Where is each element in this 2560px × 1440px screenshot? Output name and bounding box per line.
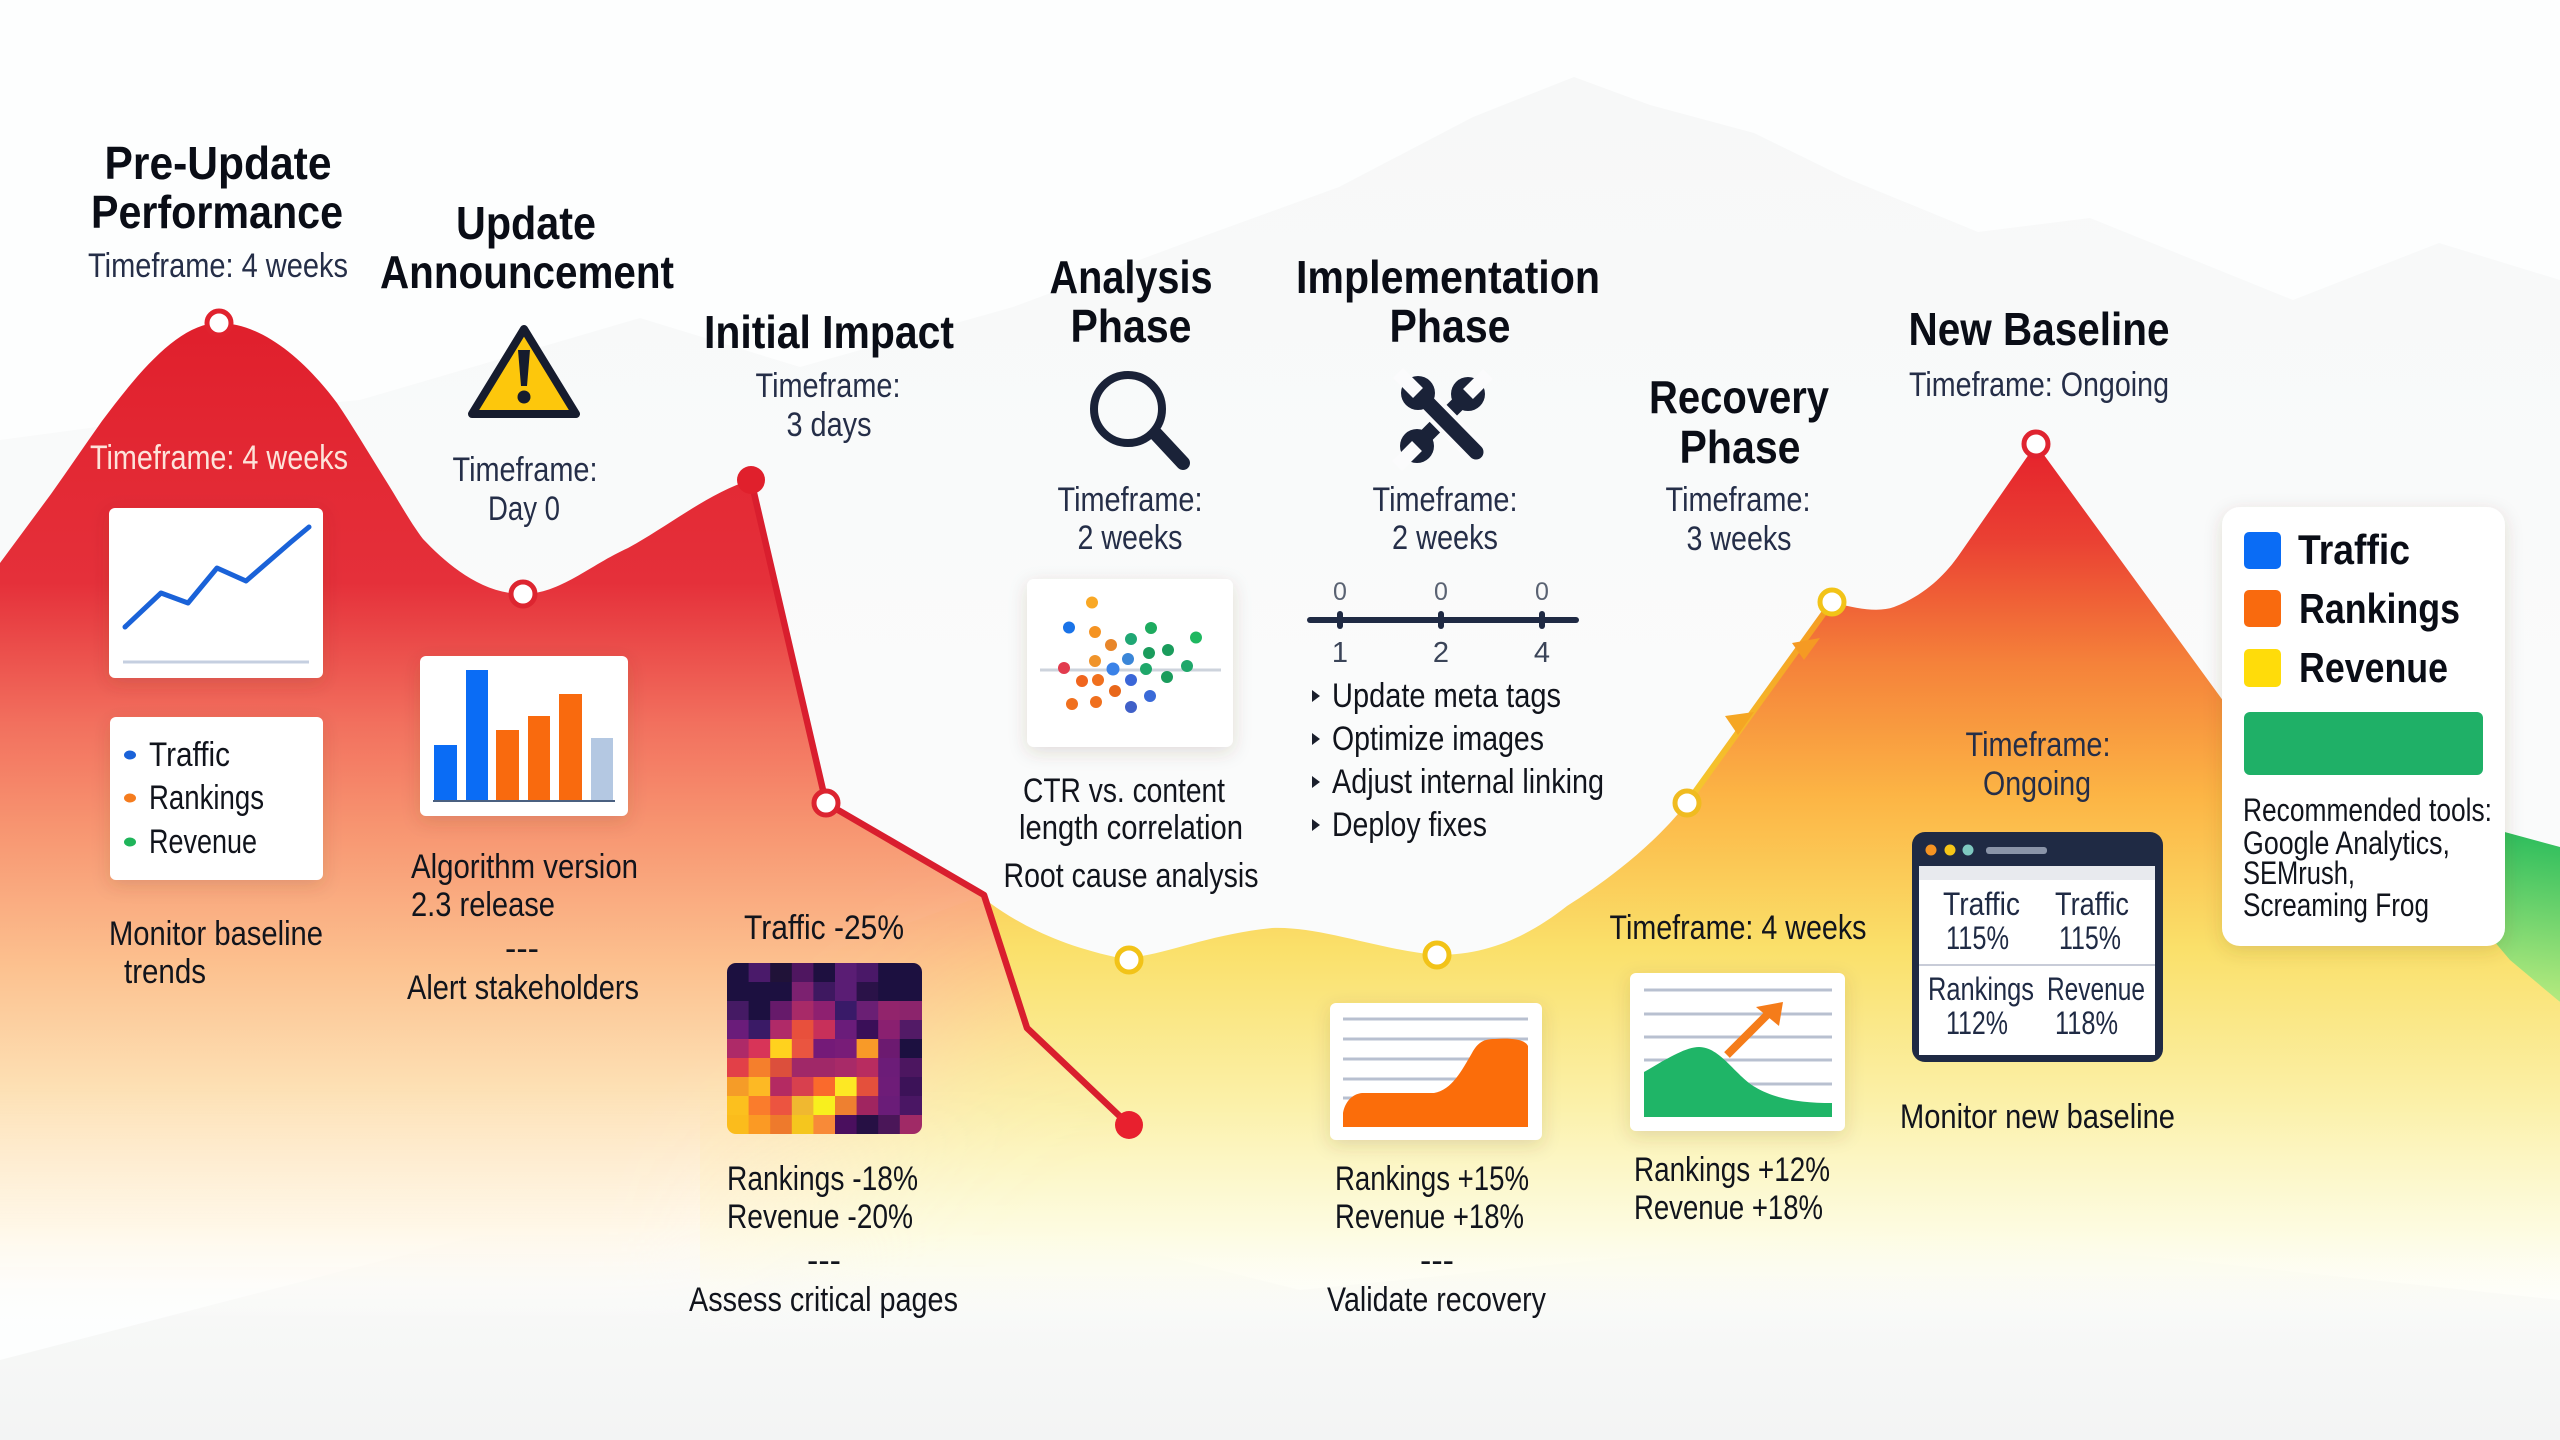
text: algorithm release: 2.3 release: [411, 886, 555, 924]
icon: warning triangle: [472, 329, 576, 414]
text: monitor baseline trends: trends: [124, 953, 206, 991]
icon: magnifying glass: [1094, 375, 1183, 463]
timeframe: 4 weeks recovery: Timeframe: 4 weeks: [1610, 909, 1866, 947]
text: algorithm release: ---: [505, 930, 539, 968]
text: validate recovery: ---: [1420, 1242, 1454, 1280]
dashboard window: 112%: [1946, 1005, 2008, 1041]
mini timeline: 0: [1535, 578, 1549, 606]
timeframe: analysis: [1058, 481, 1202, 557]
heading: initial impact: Timeframe:: [756, 367, 900, 405]
dashboard window: Revenue: [2047, 971, 2145, 1007]
dashboard window: 118%: [2055, 1005, 2118, 1041]
legend and tools card: [2222, 507, 2505, 946]
text: correlation and root cause: CTR vs. content: [1023, 772, 1225, 810]
implementation task list: Update meta tags: [1332, 677, 1561, 715]
metrics legend card: Traffic: [149, 736, 230, 774]
scatter plot card: [1027, 579, 1233, 747]
text: monitor baseline trends: [109, 915, 323, 991]
text: recovery metrics: Revenue +18%: [1634, 1189, 1823, 1227]
heading: recovery phase: Timeframe:: [1666, 481, 1810, 519]
heading: new baseline: New Baseline: [1908, 303, 2170, 355]
legend and tools card: Traffic: [2298, 526, 2410, 573]
implementation task list: Deploy fixes: [1332, 806, 1487, 844]
metrics legend card: [110, 717, 323, 880]
orange area chart card: [1330, 1003, 1542, 1140]
text: impact metrics: [689, 1160, 958, 1319]
heading: new baseline: Timeframe: Ongoing: [1909, 366, 2169, 404]
timeframe: day 0: [452, 451, 598, 528]
legend and tools card: SEMrush,: [2243, 855, 2355, 891]
mini timeline: 0: [1434, 578, 1448, 606]
dashboard window: Traffic: [1943, 886, 2020, 922]
text: monitor baseline trends: Monitor baseline: [109, 915, 323, 953]
timeline markers: [207, 311, 2048, 1139]
heading: recovery phase: [1649, 371, 1829, 558]
timeframe label on red peak: Timeframe: 4 weeks: [90, 439, 348, 477]
implementation task list: [1312, 677, 1604, 844]
text: monitor new baseline: Monitor new baseline: [1900, 1098, 2175, 1136]
legend and tools card: Recommended tools:: [2243, 792, 2492, 828]
legend and tools card: Screaming Frog: [2243, 887, 2429, 923]
mini timeline: 1: [1332, 637, 1348, 669]
timeframe: ongoing: [1966, 726, 2110, 803]
text: validate recovery: [1327, 1160, 1546, 1319]
bar chart card: [420, 656, 628, 816]
dashboard window: Rankings: [1928, 971, 2034, 1007]
text: impact metrics: Revenue -20%: [727, 1198, 913, 1236]
text: impact metrics: Rankings -18%: [727, 1160, 918, 1198]
text: recovery metrics: [1634, 1151, 1830, 1227]
text: impact metrics: Assess critical pages: [689, 1281, 958, 1319]
heading: recovery phase: 3 weeks: [1686, 520, 1792, 558]
text: validate recovery: Rankings +15%: [1335, 1160, 1529, 1198]
timeframe: ongoing: Ongoing: [1983, 765, 2091, 803]
timeframe: analysis: 2 weeks: [1078, 519, 1182, 557]
mountain area: recovery side: [700, 444, 2560, 1340]
metrics legend card: Revenue: [149, 823, 257, 861]
text: validate recovery: Validate recovery: [1327, 1281, 1546, 1319]
text: correlation and root cause: [1004, 772, 1258, 895]
timeframe: day 0: Timeframe:: [452, 451, 598, 489]
text: algorithm release: [407, 848, 639, 1007]
heading: pre-update performance: [88, 137, 348, 285]
heading: new baseline: [1908, 303, 2170, 404]
timeframe: day 0: Day 0: [488, 490, 560, 528]
text: correlation and root cause: Root cause analysis: [1004, 857, 1258, 895]
metrics legend card: Rankings: [149, 779, 264, 817]
heading: implementation phase: Implementation: [1296, 251, 1600, 303]
line chart card: [109, 508, 323, 678]
heading: initial impact: [704, 306, 954, 444]
heading: pre-update performance: Performance: [91, 186, 343, 238]
dashboard window: 115%: [1946, 920, 2009, 956]
heading: initial impact: Initial Impact: [704, 306, 954, 358]
heading: analysis phase: Phase: [1070, 300, 1192, 352]
icon: crossed wrenches: [1397, 373, 1488, 466]
legend and tools card: Google Analytics,: [2243, 825, 2450, 861]
timeframe: implementation: 2 weeks: [1392, 519, 1498, 557]
recovery arrows line: [1687, 602, 1832, 803]
dashboard window: [1912, 832, 2163, 1062]
green ridge at right edge: [2440, 828, 2560, 1002]
green area chart card: [1630, 973, 1845, 1131]
heading: implementation phase: Phase: [1390, 300, 1510, 352]
heading: analysis phase: [1050, 251, 1212, 352]
heatmap: [727, 963, 923, 1135]
dashboard window: Traffic: [2055, 886, 2129, 922]
heading: recovery phase: Phase: [1680, 421, 1800, 473]
heading: pre-update performance: Pre-Update: [104, 137, 332, 189]
red decline line: [751, 480, 1129, 1125]
dashboard window: 115%: [2059, 920, 2121, 956]
timeframe: ongoing: Timeframe:: [1966, 726, 2110, 764]
heading: recovery phase: Recovery: [1649, 371, 1829, 423]
heading: update announcement: Update: [456, 197, 596, 249]
mini timeline: 2: [1433, 637, 1449, 669]
mini timeline: 4: [1534, 637, 1550, 669]
text: impact metrics: ---: [807, 1242, 841, 1280]
mini timeline: [1310, 578, 1576, 669]
heading: update announcement: Announcement: [380, 246, 674, 298]
text: recovery metrics: Rankings +12%: [1634, 1151, 1830, 1189]
heading: update announcement: [380, 197, 674, 298]
text: validate recovery: Revenue +18%: [1335, 1198, 1524, 1236]
heading: pre-update performance: Timeframe: 4 weeks: [88, 247, 348, 285]
timeframe: implementation: Timeframe:: [1372, 481, 1518, 519]
mountain area: decline side: [0, 324, 1034, 1272]
implementation task list: Optimize images: [1332, 720, 1544, 758]
text: traffic drop: Traffic -25%: [744, 909, 904, 947]
text: correlation and root cause: length correlation: [1019, 809, 1243, 847]
legend and tools card: Revenue: [2299, 644, 2448, 691]
timeframe: implementation: [1372, 481, 1518, 557]
text: algorithm release: Algorithm version: [411, 848, 638, 886]
heading: initial impact: 3 days: [786, 406, 872, 444]
timeframe: analysis: Timeframe:: [1058, 481, 1202, 519]
implementation task list: Adjust internal linking: [1332, 763, 1604, 801]
heading: implementation phase: [1296, 251, 1600, 352]
legend and tools card: Rankings: [2299, 585, 2460, 632]
heading: analysis phase: Analysis: [1050, 251, 1212, 303]
mini timeline: 0: [1333, 578, 1347, 606]
text: algorithm release: Alert stakeholders: [407, 969, 639, 1007]
